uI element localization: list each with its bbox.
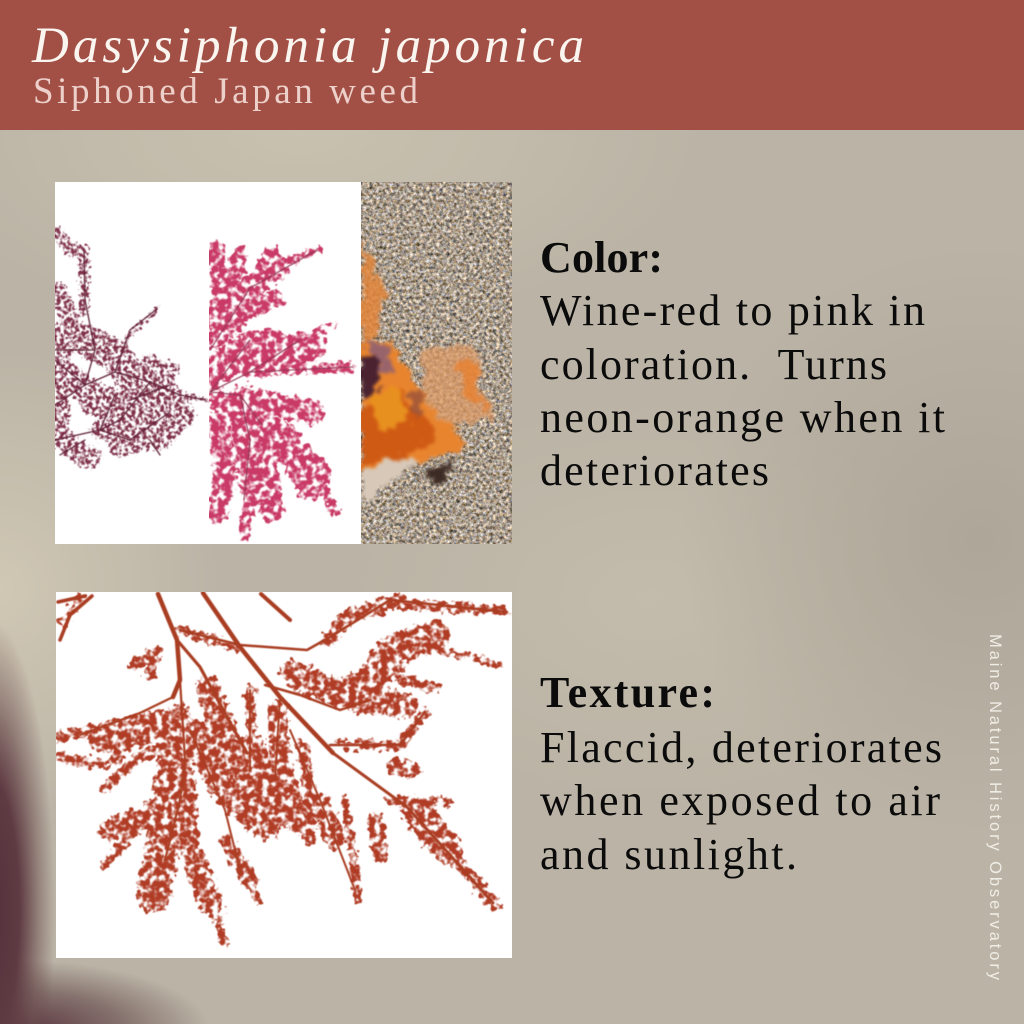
heading: texture: Texture: bbox=[540, 668, 715, 717]
text block: texture: Flaccid, deteriorates bbox=[540, 723, 942, 772]
text block: texture: and sunlight. bbox=[540, 830, 797, 879]
text block: color: coloration. Turns bbox=[540, 340, 887, 389]
text block: color: Wine-red to pink in bbox=[540, 286, 925, 335]
panel: texture specimen photo bbox=[56, 592, 512, 958]
panel: color photo collage bbox=[55, 182, 512, 544]
header banner bbox=[0, 0, 1024, 130]
text block: color: neon-orange when it bbox=[540, 393, 945, 442]
photo: deteriorating orange specimen on sand bbox=[361, 182, 512, 544]
heading: color: Color: bbox=[540, 233, 663, 282]
text block: color bbox=[540, 233, 945, 495]
text block: texture: when exposed to air bbox=[540, 776, 940, 825]
subtitle: Siphoned Japan weed bbox=[33, 71, 418, 112]
title: Dasysiphonia japonica bbox=[31, 18, 584, 74]
text block: texture bbox=[540, 668, 942, 879]
photo: bright pink specimen bbox=[210, 248, 353, 535]
photo: dark wine-red specimen bbox=[55, 232, 206, 458]
photo: red-brown specimen fronds bbox=[60, 598, 505, 942]
text block: color: deteriorates bbox=[540, 446, 769, 495]
vertical credit: Maine Natural History Observatory bbox=[986, 634, 1004, 981]
